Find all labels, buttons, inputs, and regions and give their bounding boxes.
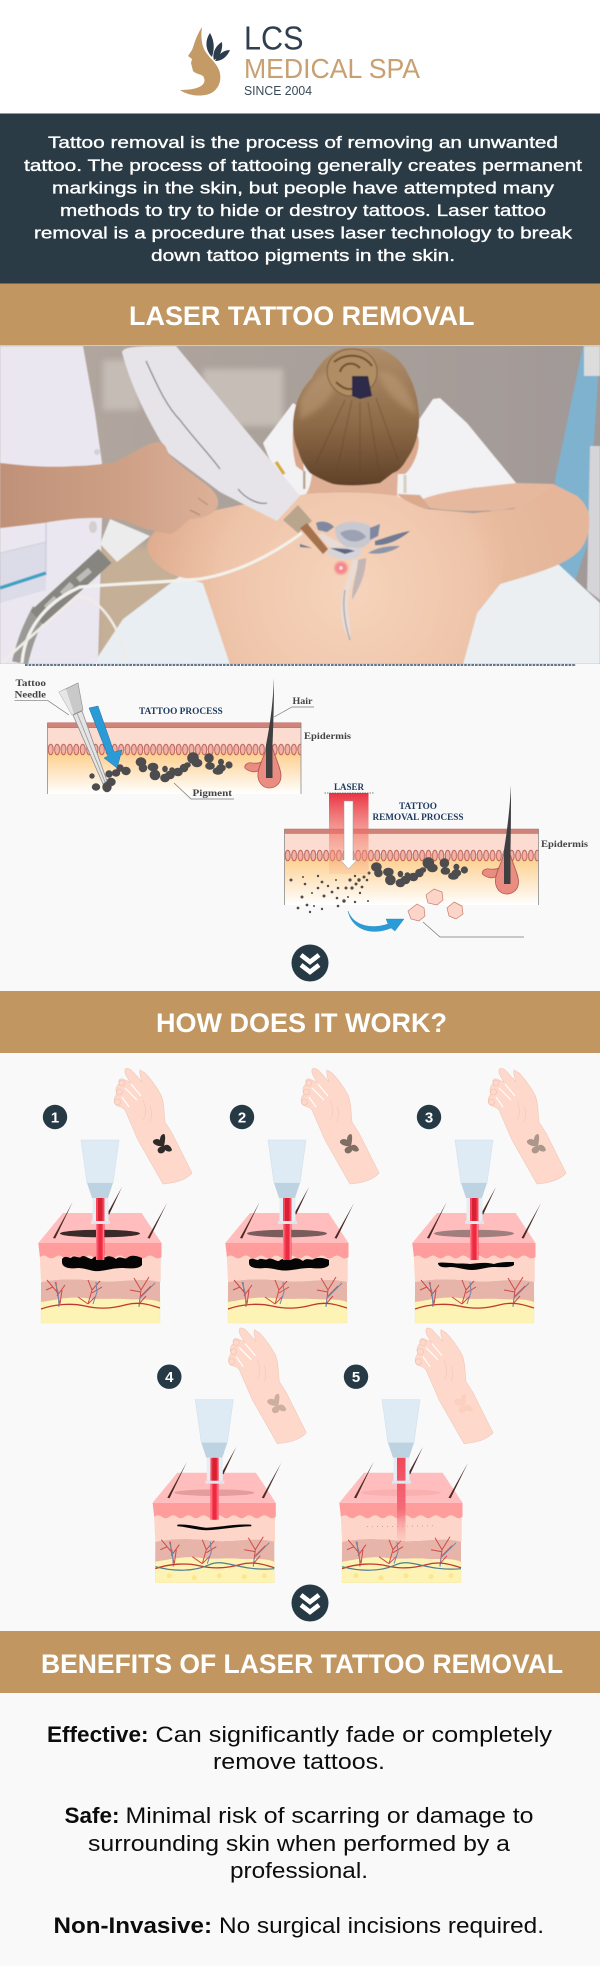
skin cross-section — [48, 723, 301, 794]
forearm — [423, 483, 553, 511]
hand — [301, 1068, 379, 1184]
veins and fat — [155, 1563, 274, 1580]
pigment — [438, 1262, 514, 1270]
laser probe — [81, 1140, 119, 1224]
skin cross-section — [284, 829, 538, 905]
logo text: LCS: LCS — [244, 20, 304, 56]
benefit: non-invasive: No surgical incisions required. — [219, 1913, 544, 1938]
earrings — [303, 471, 306, 489]
panel: intro text — [0, 114, 600, 284]
laser probe — [268, 1140, 306, 1224]
butterfly tattoo — [153, 1134, 172, 1153]
skin block — [339, 1447, 468, 1583]
butterfly tattoo — [340, 1134, 359, 1153]
fingers on shoulder — [397, 494, 430, 509]
neck — [306, 470, 398, 496]
hand — [415, 1328, 493, 1444]
panel: intro text: methods to try to hide or destroy tattoos. Laser tattoo — [60, 201, 546, 220]
pigment — [177, 1524, 251, 1530]
badge 4: 4 — [165, 1369, 174, 1386]
skin block — [225, 1187, 354, 1323]
labels: Pigment — [192, 789, 233, 799]
labels: Hair — [292, 697, 313, 707]
step 2 — [225, 1068, 379, 1323]
badge 1: 1 — [51, 1110, 59, 1126]
benefit: non-invasive — [54, 1913, 544, 1938]
labels: Tattoo — [16, 679, 46, 689]
arrow: needle direction — [89, 706, 122, 768]
photo: laser treatment on back tattoo — [0, 346, 600, 666]
hair — [293, 348, 419, 485]
laser beam — [283, 1198, 292, 1260]
logo text: since: SINCE 2004 — [244, 83, 312, 98]
badge 5 — [344, 1364, 368, 1389]
panel: intro text: down tattoo pigments in the skin. — [151, 246, 455, 265]
heading: Benefits: BENEFITS OF LASER TATTOO REMOVAL — [41, 1649, 563, 1679]
labels: TATTOO PROCESS — [139, 707, 223, 717]
pigment — [62, 1256, 142, 1271]
badge 2: 2 — [238, 1110, 246, 1126]
butterfly tattoo — [527, 1134, 546, 1153]
step 1 — [38, 1068, 192, 1323]
laser probe — [195, 1400, 233, 1484]
hand — [488, 1068, 566, 1184]
benefit: effective: remove tattoos. — [213, 1749, 385, 1774]
benefit: safe: surrounding skin when performed by a — [88, 1831, 511, 1856]
laser probe — [382, 1400, 420, 1484]
arrow: laser direction — [341, 801, 357, 869]
tattoo needle — [59, 683, 107, 784]
skin block — [38, 1187, 167, 1323]
benefit: effective: Effective: — [47, 1722, 148, 1747]
coat — [0, 346, 102, 664]
badge 3: 3 — [425, 1110, 433, 1126]
surface tattoo — [361, 1489, 441, 1496]
handpiece — [122, 346, 328, 554]
icon: double chevron — [292, 944, 328, 982]
pillow — [263, 398, 517, 500]
panel: intro text: Tattoo removal is the process of removing an unwanted — [48, 133, 558, 152]
ears — [293, 430, 304, 472]
pigment dots — [367, 1526, 437, 1527]
leader line — [423, 922, 524, 937]
icon: double chevron — [292, 1584, 328, 1622]
tattoo — [300, 522, 410, 640]
arm and hand — [0, 442, 218, 534]
surface tattoo — [247, 1230, 327, 1237]
hair follicle — [245, 678, 281, 788]
surface tattoo — [174, 1489, 254, 1496]
butterfly tattoo — [267, 1394, 286, 1413]
step 5 — [339, 1328, 493, 1583]
sheets — [93, 576, 230, 664]
pigment — [90, 753, 232, 792]
icon: leaves — [206, 33, 230, 61]
butterfly tattoo — [454, 1394, 473, 1413]
dashed divider — [25, 664, 576, 666]
badge 1 — [43, 1105, 67, 1129]
labels: Epidermis — [541, 840, 588, 850]
icon: face silhouette — [180, 27, 220, 96]
labels: Needle — [14, 690, 46, 700]
hose and cables — [2, 519, 302, 663]
heading: Laser Tattoo Removal: LASER TATTOO REMOVAL — [129, 301, 474, 331]
diagram: tattoo process — [14, 678, 351, 799]
badge 3 — [417, 1105, 441, 1129]
benefit: effective — [47, 1722, 552, 1774]
diagram: tattoo removal process — [284, 783, 588, 937]
hand — [114, 1068, 192, 1184]
pigment — [372, 858, 467, 886]
surface tattoo — [60, 1230, 140, 1237]
laser beam — [96, 1198, 104, 1260]
labels: TATTOO — [399, 802, 437, 812]
benefit: effective: Can significantly fade or completely — [156, 1722, 552, 1747]
benefit: safe: Minimal risk of scarring or damage to — [126, 1803, 534, 1828]
laser beam — [210, 1458, 219, 1520]
heading: How does it work — [0, 991, 600, 1053]
labels: Epidermis — [304, 732, 351, 742]
heading: Benefits — [0, 1631, 600, 1693]
blue panel — [552, 346, 598, 581]
badge 5: 5 — [352, 1369, 360, 1386]
leader lines — [14, 701, 314, 799]
hair follicle — [482, 785, 518, 894]
step 3 — [412, 1068, 566, 1323]
absorbing cells — [408, 889, 463, 921]
arrow: removal — [348, 911, 404, 931]
labels — [334, 783, 588, 850]
panel: intro text: markings in the skin, but people have attempted many — [52, 178, 555, 198]
surface tattoo — [434, 1230, 514, 1237]
panel: intro text: tattoo. The process of tattooing generally creates permanent — [24, 156, 582, 175]
panel: intro text: removal is a procedure that uses laser technology to break — [34, 224, 573, 242]
labels: REMOVAL PROCESS — [372, 813, 464, 823]
laser beam — [470, 1198, 478, 1260]
step 4 — [153, 1328, 306, 1583]
laser beam — [329, 793, 368, 874]
benefit: safe: Safe: — [64, 1803, 120, 1828]
pigment — [249, 1258, 329, 1271]
laser dot — [334, 562, 348, 574]
benefit: safe — [64, 1803, 534, 1883]
laser probe — [455, 1140, 493, 1224]
hand — [228, 1328, 306, 1444]
laser beam — [397, 1458, 406, 1543]
labels — [14, 679, 351, 799]
laser dashed top — [324, 792, 374, 794]
back and arm — [147, 484, 589, 664]
header: logo — [0, 0, 600, 113]
badge 4 — [157, 1364, 182, 1389]
badge 2 — [230, 1105, 254, 1129]
veins and fat — [342, 1563, 461, 1580]
skin block — [153, 1447, 281, 1583]
logo text: Medical Spa: MEDICAL SPA — [244, 53, 420, 84]
benefit: non-invasive: Non-Invasive: — [54, 1913, 212, 1938]
heading: How does it work: HOW DOES IT WORK? — [156, 1008, 447, 1038]
benefit: safe: professional. — [230, 1858, 368, 1883]
heading: Laser Tattoo Removal — [0, 284, 600, 346]
pigment particles — [290, 872, 370, 913]
skin block — [412, 1187, 541, 1323]
labels: LASER — [334, 783, 364, 793]
